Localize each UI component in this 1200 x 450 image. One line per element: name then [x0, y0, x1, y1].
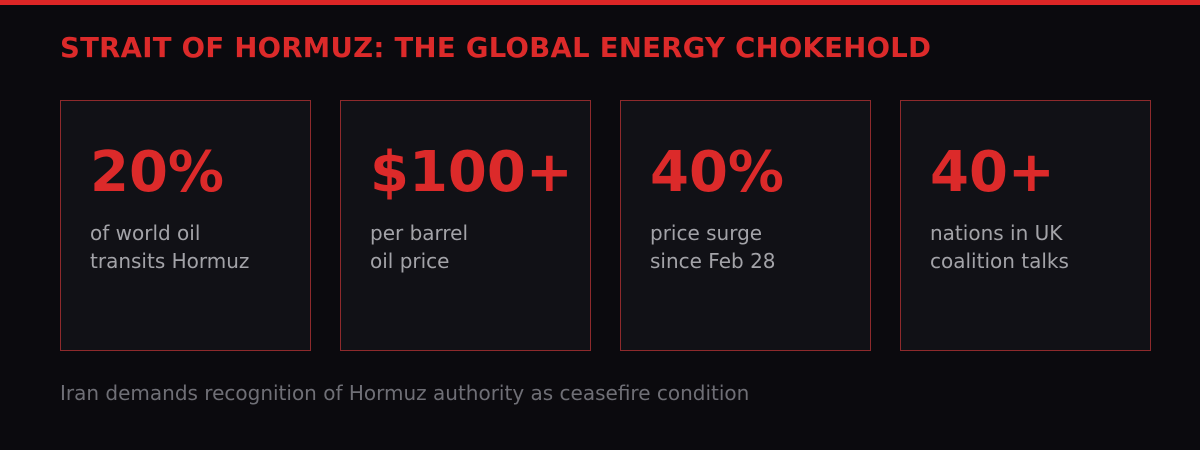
stat label: nations in UK: [930, 221, 1062, 245]
panel: 40+: [900, 100, 1151, 351]
stat label: [370, 221, 468, 273]
stat label: transits Hormuz: [90, 249, 249, 273]
stat label: of world oil: [90, 221, 200, 245]
stat label: per barrel: [370, 221, 468, 245]
panel: 40%: [620, 100, 871, 351]
stat label: [650, 221, 776, 273]
stat label: coalition talks: [930, 249, 1069, 273]
panel: $100+: [340, 100, 591, 351]
top accent bar: [0, 0, 1200, 5]
panel: 20%: [60, 100, 311, 351]
stat number: 40+: [930, 140, 1055, 205]
footer note: Iran demands recognition of Hormuz authority as ceasefire condition: [60, 381, 749, 405]
stat label: [930, 221, 1069, 273]
title: STRAIT OF HORMUZ: THE GLOBAL ENERGY CHOKEHOLD: [60, 32, 931, 64]
stat label: since Feb 28: [650, 249, 776, 273]
stat label: oil price: [370, 249, 449, 273]
stat label: price surge: [650, 221, 762, 245]
stat label: [90, 221, 249, 273]
stat number: 20%: [90, 140, 224, 205]
stat number: 40%: [650, 140, 784, 205]
stat number: $100+: [370, 140, 573, 205]
